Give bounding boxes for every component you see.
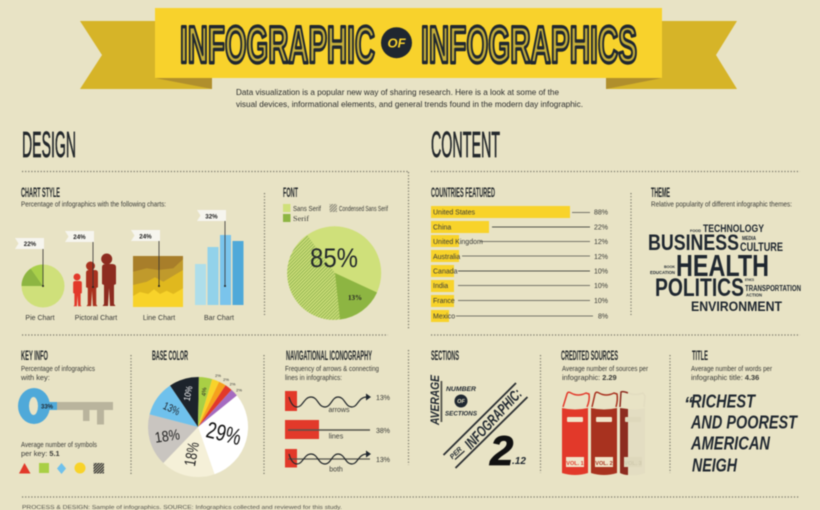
- country labels: India: [433, 283, 448, 290]
- description: Frequency of arrows & connecting: [285, 364, 379, 373]
- text: DESIGN: [22, 124, 76, 165]
- description: lines in infographics:: [285, 373, 342, 382]
- panel: font: [283, 185, 388, 320]
- country leader lines: [456, 212, 593, 316]
- country values: 10%: [594, 268, 608, 276]
- pictorial chart: Pictoral Chart: [75, 315, 117, 322]
- symbol icons: [19, 462, 104, 474]
- panel: base color: [148, 348, 248, 477]
- icon: books: VOL. 2: [595, 461, 613, 467]
- typographic lockup: .12: [512, 456, 526, 467]
- font legend: [283, 204, 388, 223]
- title: INFOGRAPHIC: [180, 16, 375, 74]
- description: infographic title: 4.36: [691, 373, 759, 382]
- word cloud: BOOK: [664, 265, 675, 269]
- bar chart: Bar Chart: [204, 315, 234, 322]
- panel: key info: KEY INFO: [21, 348, 48, 363]
- key description: Percentage of infographics: [21, 364, 95, 373]
- word cloud: TRANSPORTATION: [745, 284, 801, 293]
- example title quote: “: [684, 394, 693, 414]
- subtitle: Percentage of infographics with the following charts:: [21, 200, 166, 208]
- symbols text: per key: 5.1: [21, 449, 60, 458]
- country values: 12%: [594, 239, 608, 246]
- base color pie chart: 29%: [204, 416, 244, 450]
- word cloud: POLITICS: [655, 274, 744, 302]
- line chart: Line Chart: [143, 315, 175, 322]
- word cloud: MEDIA: [742, 236, 756, 242]
- font legend: Serif: [293, 215, 310, 223]
- panel: key info: [18, 348, 113, 474]
- intro text: visual devices, informational elements, and general trends found in the modern day infographic.: [236, 99, 583, 109]
- word cloud: ENVIRONMENT: [691, 298, 782, 314]
- icon: key: 33%: [41, 404, 54, 410]
- intro text: Data visualization is a popular new way of sharing research. Here is a look at some of the: [236, 87, 559, 97]
- typographic lockup: INFOGRAPHIC:: [461, 386, 526, 453]
- base color pie chart: 18%: [154, 426, 181, 447]
- arrows row: [285, 391, 390, 414]
- lines row: lines: [329, 434, 344, 440]
- key description: [20, 364, 95, 382]
- pictorial chart: 24%: [73, 234, 86, 241]
- word cloud: CULTURE: [740, 240, 783, 254]
- typographic lockup: [428, 374, 528, 474]
- base color pie chart: [148, 373, 248, 477]
- description: [562, 364, 648, 382]
- icon: books: [562, 392, 645, 475]
- icon: books: VOL. 3: [624, 461, 642, 467]
- typographic lockup: 2: [489, 427, 513, 474]
- panel: title: [684, 348, 798, 476]
- panel: credited sources: CREDITED SOURCES: [561, 348, 618, 363]
- base color pie chart: 18%: [182, 441, 203, 468]
- pie chart: 22%: [24, 241, 37, 248]
- panel: credited sources: [561, 348, 648, 475]
- pie chart: Pie Chart: [25, 315, 55, 322]
- example title quote: AMERICAN: [690, 432, 770, 454]
- arrows row: 13%: [376, 395, 390, 402]
- description: infographic: 2.29: [562, 373, 617, 382]
- typographic lockup: NUMBER: [446, 386, 476, 393]
- panel: font: FONT: [283, 185, 298, 200]
- country labels: France: [433, 298, 455, 305]
- word cloud: HEALTH: [676, 248, 769, 283]
- panel: sections: [428, 348, 528, 474]
- both row: [285, 449, 390, 474]
- base color pie chart: 4%: [202, 387, 208, 396]
- panel: base color: BASE COLOR: [152, 348, 188, 363]
- panel: navigational iconography: NAVIGATIONAL ICONOGRAPHY: [286, 348, 372, 363]
- panel: countries featured: COUNTRIES FEATURED: [431, 185, 495, 200]
- base color pie chart: 2%: [223, 377, 229, 382]
- country values: 10%: [594, 298, 608, 305]
- font legend: Sans Serif: [293, 206, 321, 213]
- title: OF: [387, 36, 407, 50]
- typographic lockup: OF: [457, 399, 465, 405]
- font pie chart: 13%: [348, 294, 362, 302]
- example title quote: NEIGH: [692, 454, 737, 476]
- pictorial chart: [65, 231, 117, 322]
- country labels: Canada: [433, 268, 458, 276]
- font pie chart: [287, 226, 381, 320]
- country labels: United States: [433, 210, 476, 216]
- description: Average number of sources per: [562, 364, 648, 373]
- typographic lockup: SECTIONS: [445, 410, 478, 418]
- country labels: [433, 210, 483, 320]
- pie chart: [15, 238, 64, 322]
- country values: 8%: [598, 314, 608, 320]
- symbols text: [21, 440, 97, 458]
- lines row: 38%: [376, 428, 390, 435]
- icon: books: VOL. 1: [566, 461, 584, 467]
- word cloud: [648, 223, 801, 314]
- country values: [594, 210, 608, 320]
- word cloud: ACTION: [746, 292, 762, 298]
- word cloud: EDUCATION: [650, 270, 675, 275]
- base color pie chart: 2%: [236, 388, 242, 392]
- country labels: Mexico: [433, 314, 455, 320]
- word cloud: BUSINESS: [648, 230, 739, 255]
- country labels: Australia: [433, 254, 460, 261]
- intro text: [236, 87, 583, 109]
- country values: 10%: [594, 283, 608, 290]
- panel: sections: SECTIONS: [431, 348, 459, 363]
- country labels: China: [433, 224, 451, 232]
- base color pie chart: 13%: [161, 400, 182, 418]
- font pie chart: 85%: [310, 243, 358, 273]
- typographic lockup: PER: [449, 446, 464, 461]
- word cloud: TECHNOLOGY: [703, 223, 765, 235]
- text: CONTENT: [431, 124, 500, 165]
- panel: navigational iconography: [285, 348, 390, 474]
- panel: chart style: [15, 185, 244, 322]
- base color pie chart: 2%: [230, 382, 236, 386]
- country values: 88%: [594, 210, 608, 216]
- country values: 12%: [594, 254, 608, 261]
- bar chart: [195, 210, 244, 322]
- base color pie chart: 2%: [215, 373, 221, 378]
- panel: title: TITLE: [692, 348, 708, 363]
- description: [285, 364, 379, 382]
- lines row: [285, 420, 390, 440]
- panel: chart style: CHART STYLE: [21, 185, 60, 200]
- country bars: [431, 206, 570, 322]
- subtitle: Relative popularity of different infographic themes:: [651, 200, 792, 208]
- line chart: 24%: [139, 234, 152, 240]
- both row: both: [329, 466, 343, 474]
- example title quote: RICHEST: [691, 390, 756, 412]
- example title quote: [684, 390, 798, 476]
- symbols text: Average number of symbols: [21, 440, 97, 449]
- panel: countries featured: [431, 185, 608, 322]
- line chart: [131, 230, 183, 322]
- bar chart: 32%: [205, 214, 218, 220]
- font legend: Condensed Sans Serif: [339, 206, 388, 213]
- country labels: United Kingdom: [433, 239, 483, 246]
- typographic lockup: AVERAGE: [428, 374, 442, 426]
- banner ribbon: [80, 8, 737, 89]
- panel: theme: [648, 185, 801, 314]
- panel: theme: THEME: [651, 185, 670, 200]
- word cloud: ETHICS: [745, 278, 754, 282]
- base color pie chart: 10%: [182, 385, 195, 402]
- arrows row: arrows: [328, 407, 350, 414]
- word cloud: FOOD: [690, 228, 701, 233]
- country values: 22%: [594, 224, 608, 232]
- both row: 13%: [376, 457, 390, 464]
- title: INFOGRAPHICS: [421, 16, 637, 74]
- description: Average number of words per: [691, 364, 772, 373]
- key description: with key:: [20, 373, 50, 382]
- description: [691, 364, 772, 382]
